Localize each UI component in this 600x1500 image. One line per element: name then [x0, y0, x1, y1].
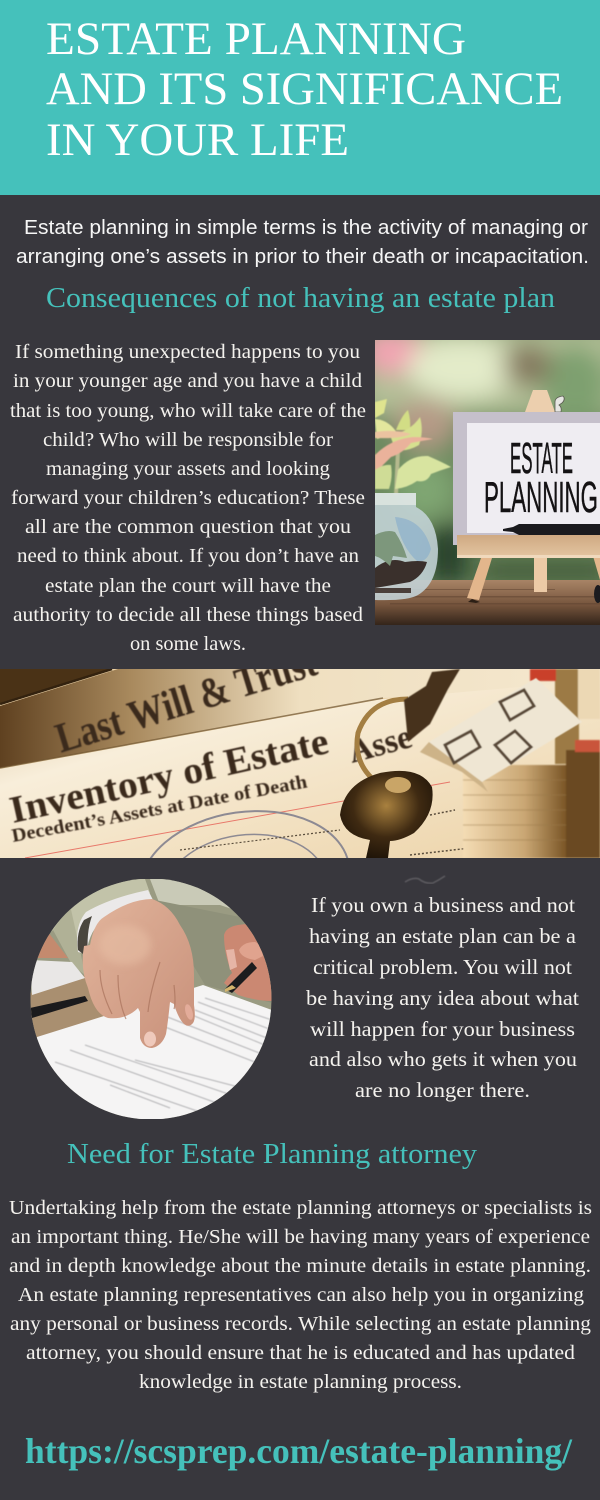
text block: attorney: an important thing. He/She will be having many years of experience [11, 1226, 590, 1248]
text block: consequences: on some laws. [130, 633, 246, 655]
document titles: Decedent’s Assets at Date of Death [10, 772, 309, 847]
paper lines [55, 998, 272, 1112]
dark background corner [0, 669, 110, 703]
title: IN YOUR LIFE [46, 114, 349, 166]
document titles: Asse [344, 718, 416, 771]
document titles [8, 669, 414, 843]
easel top [525, 390, 555, 412]
text block: attorney: attorney, you should ensure that he is educated and has updated [26, 1342, 575, 1364]
text block: consequences: authority to decide all these things based [13, 604, 363, 626]
text block: consequences: If something unexpected happens to you [15, 341, 360, 363]
pointing hand [83, 899, 195, 1048]
plant [375, 399, 451, 495]
text block: consequences: that is too young, who will take care of the [10, 400, 366, 422]
text block: business: having an estate plan can be a [309, 924, 576, 948]
text block: attorney: knowledge in estate planning process. [139, 1371, 462, 1393]
ledge [457, 535, 600, 555]
text block: consequences: managing your assets and looking [46, 458, 330, 480]
glass jar [375, 493, 438, 600]
document titles: Last Will & Trust [50, 640, 322, 763]
header banner [0, 0, 600, 195]
text block: attorney: An estate planning representatives can also help you in organizing [18, 1284, 584, 1306]
photo: estate planning easel [375, 340, 600, 625]
text block: attorney: Undertaking help from the estate planning attorneys or specialists is [9, 1197, 592, 1219]
text block: business: be having any idea about what [306, 986, 579, 1010]
text block: consequences: all are the common question that you [25, 516, 351, 538]
intro text: arranging one’s assets in prior to their death or incapacitation. [16, 246, 589, 268]
right hand with pen [224, 924, 272, 1001]
easel legs [467, 556, 600, 600]
text block: business: If you own a business and not [311, 893, 575, 917]
arm left [38, 934, 68, 958]
text block: consequences: estate plan the court will have the [45, 575, 331, 597]
intro text: Estate planning in simple terms is the activity of managing or [24, 217, 588, 239]
paper [30, 985, 272, 1119]
sleeve [50, 879, 150, 936]
table [375, 580, 600, 625]
website link: https://scsprep.com/estate-planning/ [25, 1431, 573, 1471]
text block: consequences [10, 341, 366, 655]
text block: attorney: any personal or business records. While selecting an estate planning [10, 1313, 591, 1335]
text block: consequences: forward your children’s education? These [11, 487, 365, 509]
text block: business: critical problem. You will not [313, 955, 572, 979]
white cuff [77, 890, 154, 954]
text block: attorney: and in depth knowledge about the minute details in estate planning. [9, 1255, 591, 1277]
title [46, 13, 563, 166]
text block: consequences: need to think about. If you don’t have an [17, 545, 359, 567]
text block: business [306, 893, 579, 1102]
intro text [16, 217, 589, 268]
key [340, 771, 433, 858]
black pen on desk [30, 996, 88, 1018]
pen [503, 524, 600, 535]
board lettering [486, 442, 596, 513]
text block: attorney [9, 1197, 592, 1393]
text block: business: and also who gets it when you [309, 1047, 577, 1071]
house keyring and model [404, 669, 582, 792]
title: ESTATE PLANNING [46, 13, 466, 65]
board [453, 412, 600, 545]
faint mark above business text [405, 876, 445, 883]
jacket backdrop [150, 879, 230, 908]
text block: business: are no longer there. [355, 1078, 530, 1102]
text block: business: will happen for your business [310, 1017, 575, 1041]
photo: last will and inventory of estate [0, 669, 600, 858]
heading: consequences: Consequences of not having an estate plan [46, 283, 555, 314]
coin stacks [463, 669, 600, 858]
upper document [0, 669, 600, 768]
desk [30, 976, 103, 1040]
text block: consequences: child? Who will be responsible for [43, 429, 333, 451]
text block: consequences: in your younger age and you have a child [13, 370, 362, 392]
seal and rule lines [24, 782, 464, 858]
heading: attorney: Need for Estate Planning attorney [67, 1139, 477, 1170]
key ring [357, 699, 408, 791]
photo: hand pointing at document [30, 879, 280, 1119]
lower document [0, 680, 600, 858]
title: AND ITS SIGNIFICANCE [46, 63, 563, 115]
document titles: Inventory of Estate [6, 720, 332, 832]
